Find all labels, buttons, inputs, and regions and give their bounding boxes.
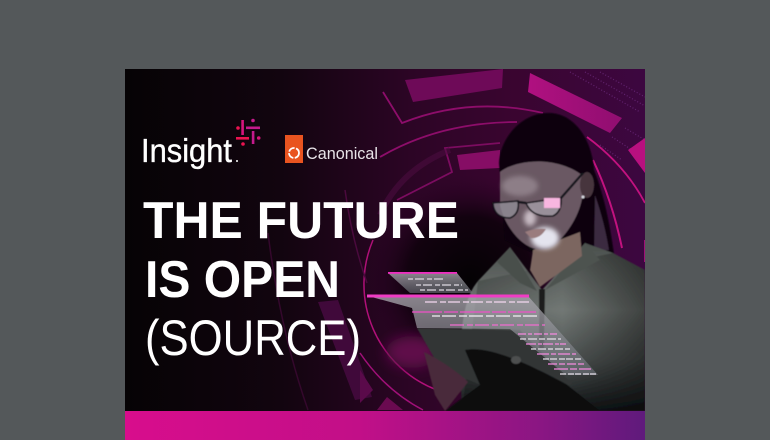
woman: neck <box>530 232 582 287</box>
ring segments <box>318 69 645 410</box>
logo: Canonical <box>285 135 378 163</box>
woman <box>417 113 645 411</box>
circular tech rings <box>268 92 645 410</box>
woman: shirt <box>461 243 645 411</box>
title <box>143 192 459 366</box>
logo: Canonical: Canonical <box>306 144 378 163</box>
dark core of rings <box>391 192 552 336</box>
tablet and hands <box>417 328 600 411</box>
logo: Insight <box>141 119 261 169</box>
woman: face <box>500 161 594 250</box>
woman: hair <box>499 113 614 268</box>
pink arm glow <box>386 336 438 368</box>
title: IS OPEN <box>145 251 340 309</box>
logo: Insight: Insight <box>141 132 232 169</box>
title: (SOURCE) <box>145 310 361 366</box>
panel: hero card <box>125 69 645 411</box>
dotted texture upper right <box>570 72 645 160</box>
gradient footer bar <box>125 411 645 440</box>
icon: Insight mark <box>236 119 261 146</box>
woman: glasses <box>493 173 583 218</box>
hologram code panels <box>367 272 598 375</box>
title: THE FUTURE <box>143 192 459 250</box>
